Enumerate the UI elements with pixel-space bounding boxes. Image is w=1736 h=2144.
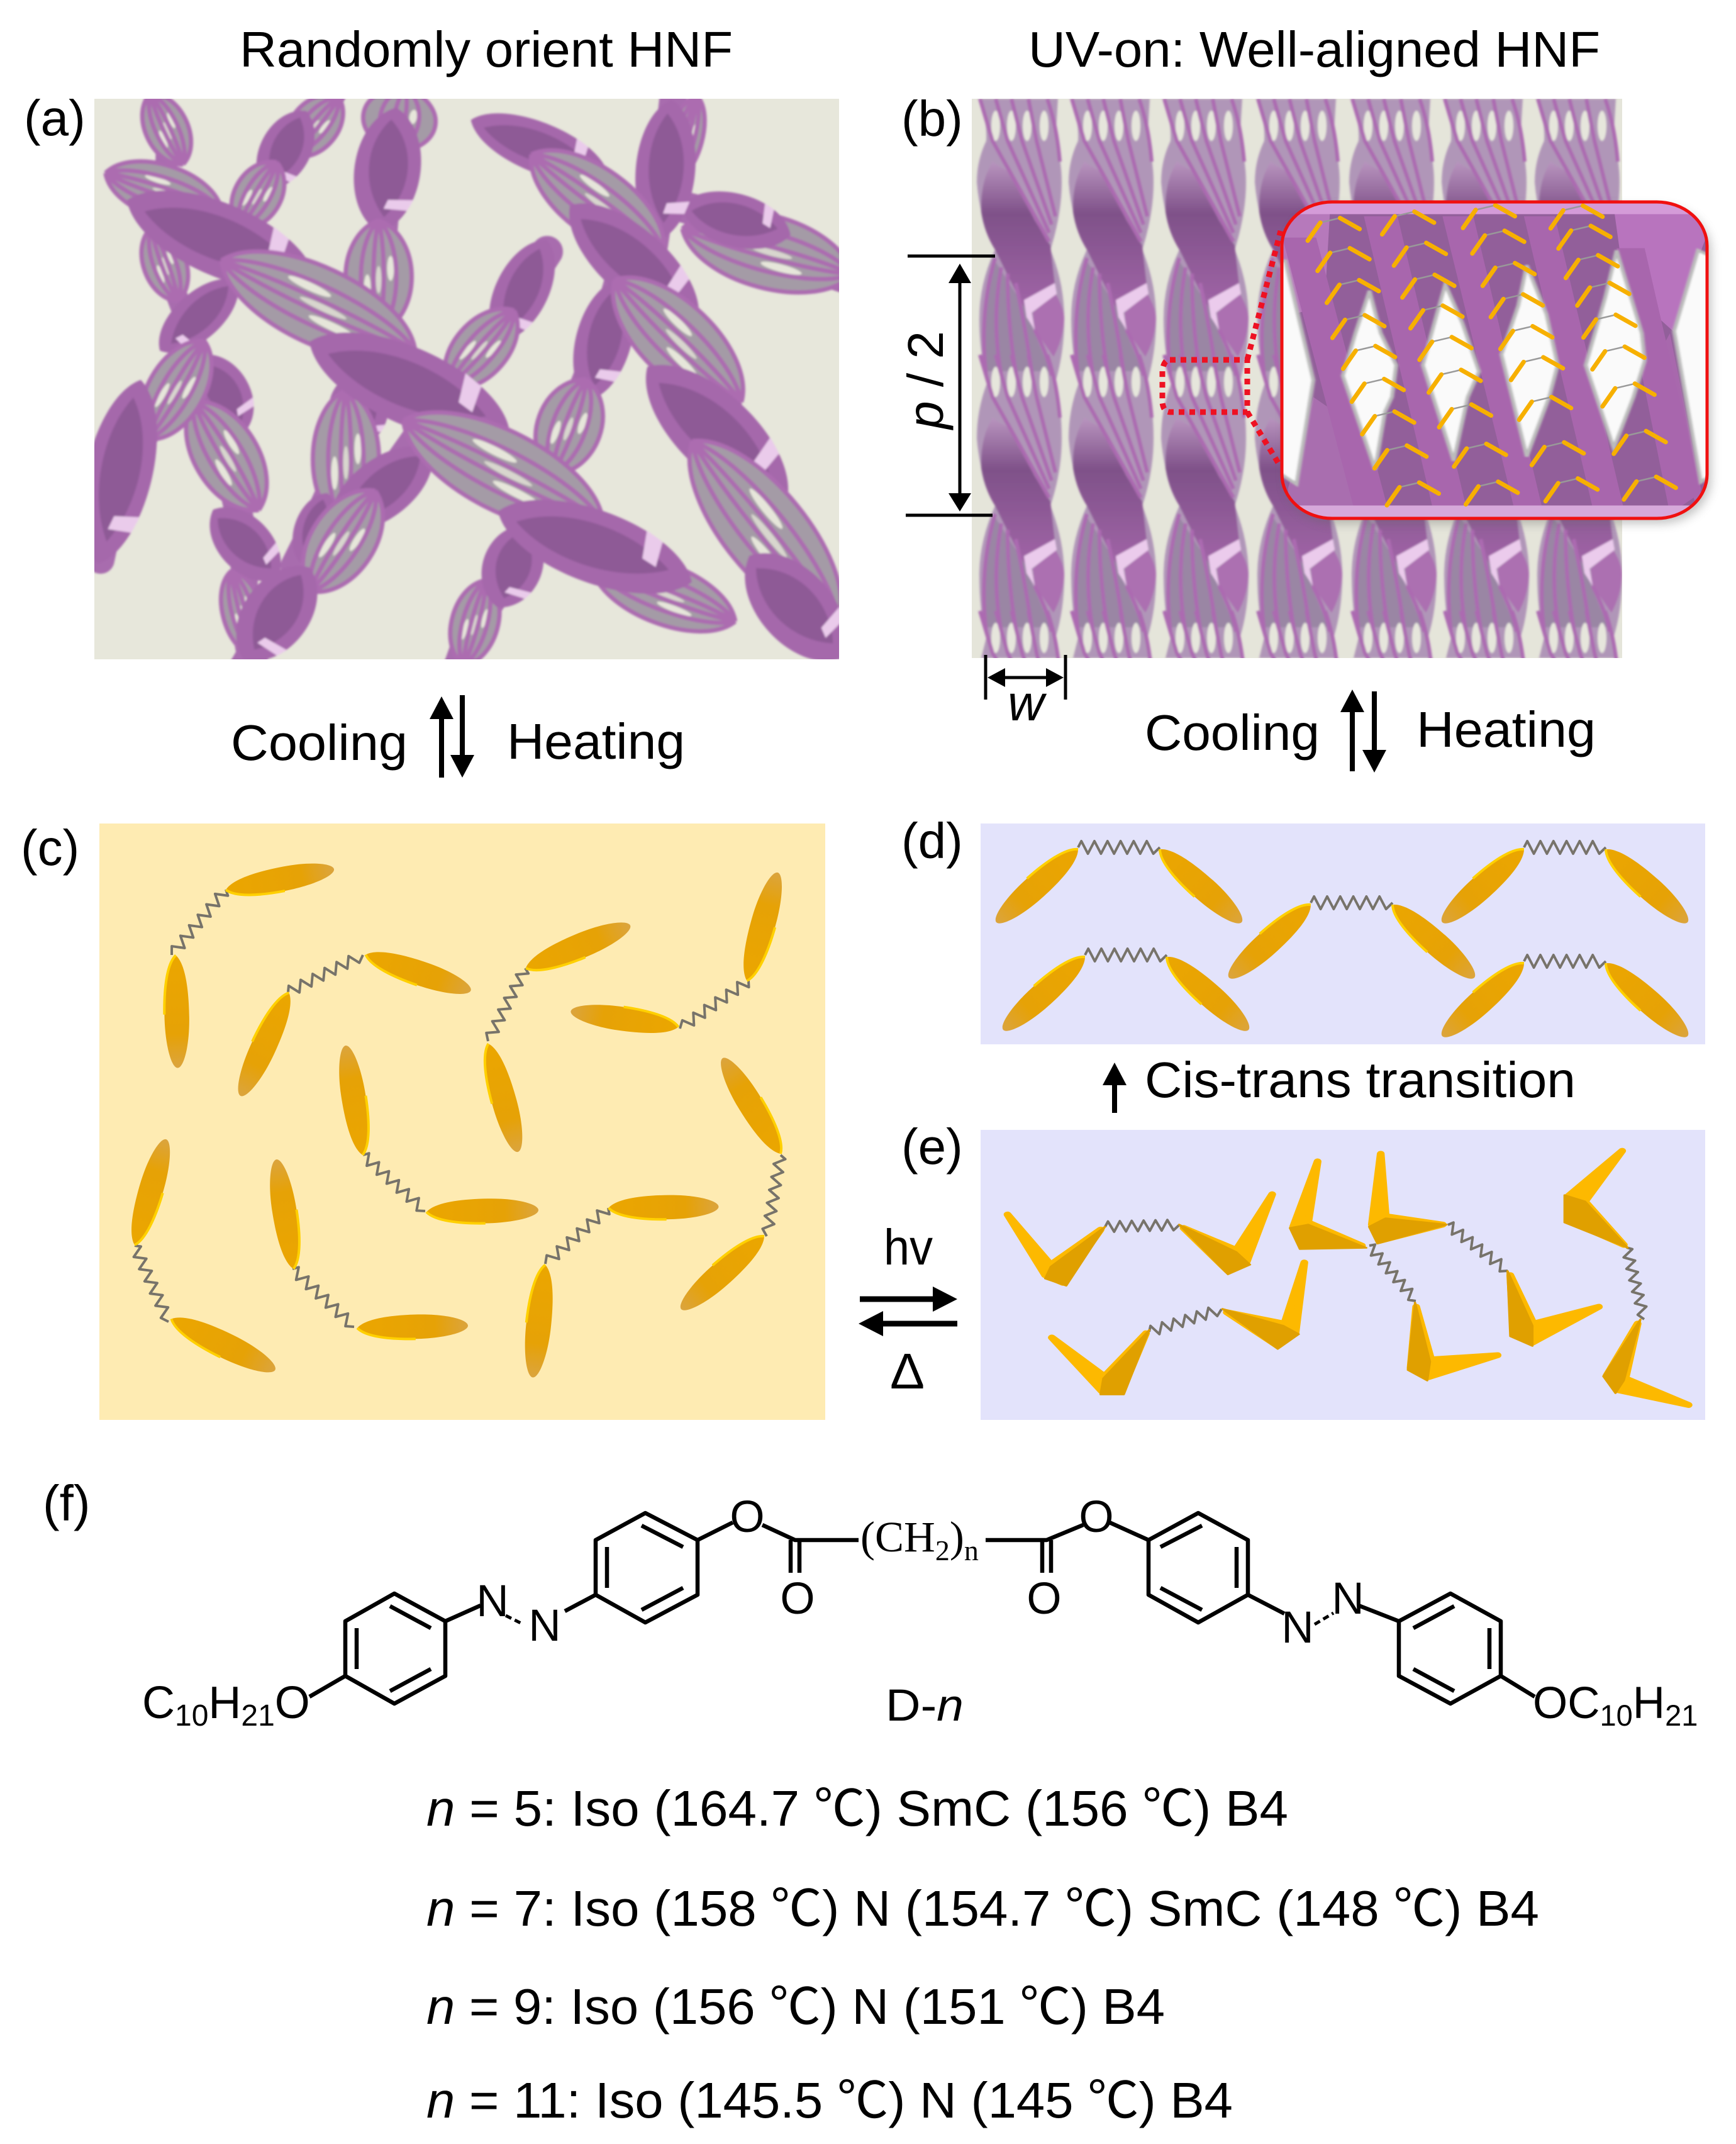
- chemical structure D-n: N: [528, 1601, 561, 1651]
- dimer 3: [1434, 840, 1696, 931]
- strand group back: [94, 99, 839, 659]
- chemical structure D-n: [142, 1492, 1698, 1733]
- panel d: ordered trans dimers: [981, 824, 1705, 1046]
- panel e: bent cis dimers: [981, 1130, 1705, 1420]
- column 5: [1348, 99, 1438, 658]
- chemical structure D-n: OC: [1533, 1678, 1600, 1728]
- chemical structure D-n: 10: [175, 1699, 208, 1733]
- phase sequence n=5: n = 5: Iso (164.7 ℃) SmC (156 ℃) B4: [426, 1780, 1288, 1836]
- chemical structure D-n: 10: [1600, 1699, 1633, 1732]
- hv and delta equilibrium arrows: hv: [884, 1219, 933, 1275]
- panel c: disordered trans dimers: [99, 824, 825, 1420]
- column 3: [1160, 99, 1250, 658]
- label c: (c): [21, 820, 79, 876]
- bonds: [309, 1522, 1535, 1697]
- column 1: [976, 99, 1066, 658]
- column 2: [1067, 99, 1157, 658]
- column 7: [1533, 99, 1622, 658]
- diagonal bands: [1283, 216, 1701, 514]
- rods c: [123, 857, 791, 1382]
- panel b: well-aligned helical nanofilaments: [972, 99, 1622, 658]
- chemical structure D-n: ): [950, 1513, 964, 1561]
- ring 3: [1149, 1513, 1248, 1622]
- bent rods e: [1008, 1151, 1689, 1405]
- inset shadow: [1286, 207, 1711, 523]
- hv and delta equilibrium arrows: [859, 1219, 957, 1399]
- left cooling heating: Heating: [507, 713, 685, 769]
- dimer 5: [1434, 954, 1696, 1046]
- phase sequence n=7: n = 7: Iso (158 ℃) N (154.7 ℃) SmC (148 ℃) B4: [426, 1880, 1539, 1936]
- chemical structure D-n: O: [780, 1574, 815, 1624]
- front strands spine: [145, 148, 818, 629]
- label e: (e): [901, 1119, 963, 1175]
- chemical structure D-n: 21: [1665, 1699, 1698, 1732]
- chemical structure D-n: O: [275, 1678, 310, 1728]
- label d: (d): [901, 813, 963, 869]
- dimer 1: [988, 840, 1250, 931]
- ring 1: [345, 1594, 445, 1704]
- column 4: [1254, 99, 1344, 658]
- springs e: [1105, 1220, 1649, 1337]
- right cooling heating: [1145, 690, 1596, 773]
- dimer 2: [1221, 896, 1483, 986]
- right cooling heating: Cooling: [1145, 705, 1320, 761]
- ring 2: [596, 1513, 698, 1622]
- chemical structure D-n: n: [964, 1534, 979, 1566]
- chemical structure D-n: 21: [241, 1699, 275, 1733]
- compound label D-n: D-n: [886, 1681, 964, 1731]
- springs c: [130, 886, 786, 1331]
- chemical structure D-n: N: [1332, 1574, 1364, 1624]
- label a: (a): [24, 90, 86, 146]
- dotted zoom selection and leader lines: [1162, 231, 1281, 467]
- phase sequence n=11: n = 11: Iso (145.5 ℃) N (145 ℃) B4: [426, 2072, 1233, 2128]
- dimension: p / 2: p / 2: [898, 331, 954, 430]
- chemical structure D-n: C: [142, 1678, 175, 1728]
- right cooling heating: Heating: [1416, 701, 1596, 757]
- hv and delta equilibrium arrows: Δ: [890, 1343, 925, 1399]
- chemical structure D-n: H: [1633, 1678, 1665, 1728]
- panel a: randomly oriented helical nanofilaments: [94, 99, 839, 659]
- chemical structure D-n: N: [1281, 1603, 1314, 1653]
- chemical structure D-n: O: [1027, 1574, 1062, 1624]
- label b: (b): [901, 91, 963, 147]
- column 6: [1440, 99, 1531, 658]
- chemical structure D-n: 2: [935, 1534, 950, 1566]
- cis-trans transition: Cis-trans transition: [1145, 1052, 1576, 1108]
- dimension: w: w: [1008, 675, 1047, 731]
- left cooling heating: Cooling: [231, 715, 408, 771]
- upper left and right lobes: [1277, 208, 1717, 514]
- molecule pairs: [1308, 205, 1676, 505]
- chemical structure D-n: H: [208, 1678, 241, 1728]
- chemical structure D-n: N: [476, 1577, 509, 1626]
- chemical structure D-n: O: [730, 1492, 765, 1542]
- inset: magnified filament with molecules: [1277, 195, 1717, 528]
- white gaps between bands: [1277, 250, 1717, 484]
- ring 4: [1399, 1594, 1501, 1704]
- chemical structure D-n: (CH: [860, 1513, 935, 1561]
- top and bottom glow: [1277, 201, 1717, 214]
- back strands spine: [101, 94, 843, 667]
- dimension: p / 2: [898, 256, 995, 515]
- phase sequence n=9: n = 9: Iso (156 ℃) N (151 ℃) B4: [426, 1979, 1165, 2035]
- dimer 4: [995, 947, 1257, 1039]
- left cooling heating: [231, 695, 685, 778]
- title: UV-on Well-aligned HNF: UV-on: Well-aligned HNF: [1028, 21, 1600, 77]
- chemical structure D-n: O: [1079, 1492, 1114, 1542]
- dimension: w: [986, 655, 1066, 731]
- label f: (f): [43, 1475, 91, 1531]
- title: Randomly orient HNF: Randomly orient HNF: [240, 21, 733, 77]
- strand group front: [102, 112, 839, 659]
